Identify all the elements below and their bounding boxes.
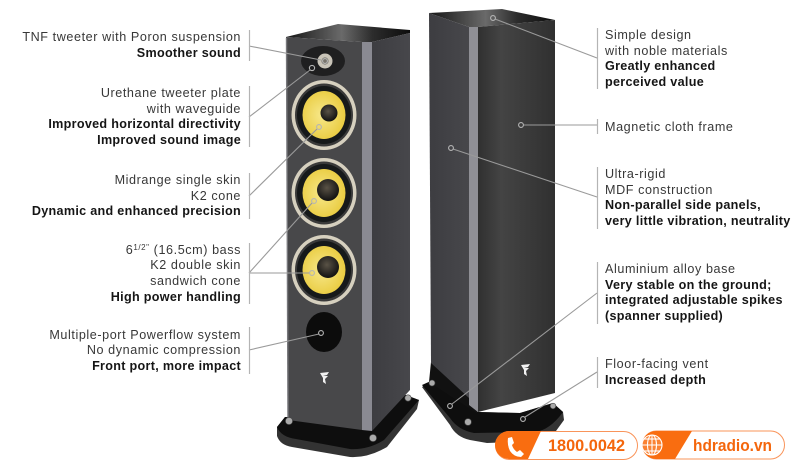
callout: vent: Increased depth — [605, 373, 706, 387]
callout: base: integrated adjustable spikes — [605, 293, 783, 307]
callout: MDF: Ultra-rigid — [605, 167, 666, 181]
logo front — [320, 372, 329, 384]
icon: phone — [508, 437, 524, 457]
front panel — [286, 37, 362, 430]
phone badge: 1800.0042 — [548, 437, 625, 455]
callout: design: Simple design — [605, 28, 692, 42]
bevel strip — [362, 42, 372, 431]
callout: midrange: Midrange single skin — [115, 173, 241, 187]
rear base rim — [422, 380, 564, 443]
callout: vent: Floor-facing vent — [605, 357, 709, 371]
callout: design — [598, 28, 728, 89]
leader lines — [249, 16, 597, 421]
side panel — [372, 33, 410, 431]
top face — [286, 24, 410, 42]
base feet — [285, 395, 411, 442]
callout: tweeter plate: Urethane tweeter plate — [101, 86, 241, 100]
left edge highlight — [286, 38, 288, 420]
callout: tweeter: Smoother sound — [137, 46, 241, 60]
web badge — [642, 431, 784, 459]
front speaker — [277, 24, 419, 457]
speaker base rim — [277, 394, 419, 457]
callout: base: Aluminium alloy base — [605, 262, 736, 276]
callout: MDF — [598, 167, 791, 229]
rear top — [429, 9, 555, 27]
rear strip — [469, 27, 478, 412]
callout: bass: High power handling — [111, 290, 241, 304]
callout: tweeter plate: Improved sound image — [97, 133, 241, 147]
rear base top — [422, 380, 563, 433]
front port — [306, 312, 342, 352]
callout: MDF: Non-parallel side panels, — [605, 198, 761, 212]
callout: base: (spanner supplied) — [605, 309, 723, 323]
callout: design: Greatly enhanced — [605, 59, 716, 73]
rear speaker — [422, 9, 564, 443]
callout: base — [598, 262, 783, 324]
callout: bass: 6 — [126, 243, 133, 257]
tweeter plate — [301, 46, 345, 76]
callout: bass — [111, 243, 250, 304]
callout: port — [49, 327, 250, 374]
callout: port: No dynamic compression — [87, 343, 241, 357]
callout: MDF: very little vibration, neutrality — [605, 214, 791, 228]
rear cloth — [478, 20, 555, 412]
rear left side — [429, 13, 469, 398]
phone badge — [495, 431, 638, 460]
logo rear — [521, 364, 530, 376]
callout: tweeter plate: Improved horizontal directivity — [48, 117, 241, 131]
bass driver lower — [292, 235, 356, 305]
callout: midrange — [32, 173, 250, 219]
callout: bass: (16.5cm) bass — [150, 243, 241, 257]
callout: bass: K2 double skin — [150, 258, 241, 272]
callout: base: Very stable on the ground; — [605, 278, 772, 292]
speaker base top — [277, 394, 419, 449]
callout: tweeter plate — [48, 86, 250, 147]
callout: bass: 1/2" — [133, 243, 150, 252]
callout: tweeter — [22, 30, 250, 61]
web badge: hdradio.vn — [693, 437, 772, 455]
callout: port: Multiple-port Powerflow system — [49, 328, 241, 342]
rear underside — [429, 362, 478, 414]
callout: midrange: K2 cone — [191, 189, 241, 203]
callout: design: with noble materials — [604, 44, 728, 58]
callout: port: Front port, more impact — [92, 359, 242, 373]
callout: tweeter plate: with waveguide — [146, 102, 241, 116]
callout: cloth frame: Magnetic cloth frame — [605, 120, 734, 134]
callout: midrange: Dynamic and enhanced precision — [32, 204, 241, 218]
rear feet — [429, 380, 556, 425]
bass driver upper — [292, 158, 356, 228]
tweeter — [318, 54, 332, 68]
callout: vent — [598, 357, 709, 388]
callout: design: perceived value — [605, 75, 704, 89]
icon: globe — [642, 435, 662, 455]
midrange driver — [292, 80, 356, 150]
callout: bass: sandwich cone — [150, 274, 241, 288]
callout: tweeter: TNF tweeter with Poron suspension — [22, 30, 241, 44]
callout: MDF: MDF construction — [605, 183, 713, 197]
